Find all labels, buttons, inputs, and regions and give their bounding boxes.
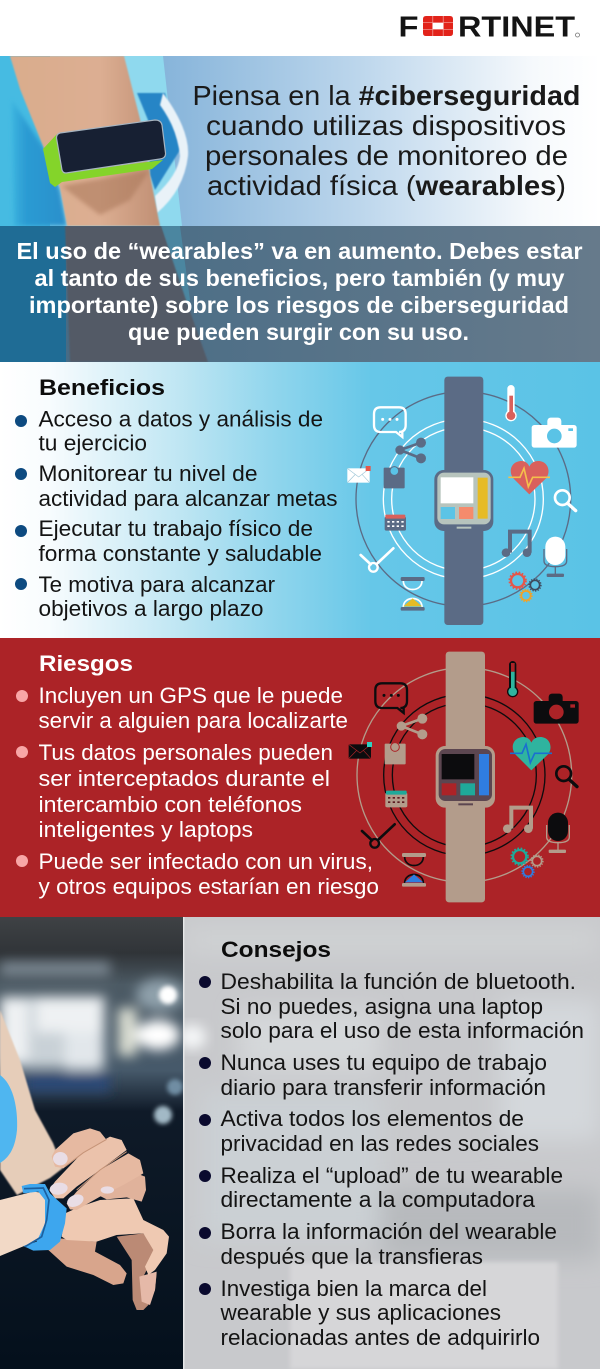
list: riesgos: inteligentes y laptops xyxy=(38,817,253,842)
icon: hourglass xyxy=(401,577,425,611)
panel: beneficios xyxy=(0,362,600,638)
list: consejos: relacionadas antes de adquirirlo xyxy=(220,1325,540,1350)
icon: microphone xyxy=(544,537,567,577)
banner text xyxy=(16,238,583,345)
list: consejos: Nunca uses tu equipo de trabajo xyxy=(220,1050,547,1075)
list: riesgos xyxy=(16,683,379,899)
list: beneficios: tu ejercicio xyxy=(38,430,147,456)
icon: chat bubble xyxy=(375,683,407,713)
upper fingers xyxy=(99,1173,146,1202)
banner text: El uso de “wearables” va en aumento. Debes estar xyxy=(16,238,583,264)
icon: scale xyxy=(385,743,406,764)
list: riesgos: ser interceptados durante el xyxy=(38,766,330,791)
heading: riesgos: Riesgos xyxy=(39,651,133,676)
title xyxy=(192,80,580,201)
list: beneficios: Te motiva para alcanzar xyxy=(38,572,275,597)
panel: consejos xyxy=(178,917,600,1369)
list: beneficios: objetivos a largo plazo xyxy=(38,596,264,621)
banner text: al tanto de sus beneficios, pero también (y muy xyxy=(34,265,565,291)
panel: riesgos xyxy=(0,638,600,917)
list: consejos: Deshabilita la función de bluetooth. xyxy=(220,969,576,994)
band screen xyxy=(56,120,166,173)
list: consejos: directamente a la computadora xyxy=(220,1187,536,1212)
forearm xyxy=(0,1192,47,1256)
illustration: blue smartwatch with icons xyxy=(347,377,577,625)
panel: intro banner xyxy=(0,226,600,362)
hand and wrist xyxy=(0,1128,169,1310)
icon: gears xyxy=(509,572,541,602)
list: consejos: diario para transferir información xyxy=(220,1075,546,1100)
back of hand xyxy=(62,1198,169,1275)
list: beneficios: forma constante y saludable xyxy=(38,541,322,566)
lower thumb xyxy=(48,1238,127,1285)
icon: scale xyxy=(384,467,405,488)
list: consejos: Realiza el “upload” de tu wearable xyxy=(220,1163,563,1188)
list: riesgos: Tus datos personales pueden xyxy=(38,740,333,765)
panel: header with photo and title xyxy=(0,56,600,226)
photo: arm with green fitness band xyxy=(0,56,188,226)
list: consejos: Investiga bien la marca del xyxy=(220,1276,487,1301)
banner text: importante) sobre los riesgos de ciberseguridad xyxy=(29,292,569,318)
icon: heart xyxy=(510,737,552,770)
list: riesgos: Incluyen un GPS que le puede xyxy=(38,683,343,708)
list: riesgos: Puede ser infectado con un virus, xyxy=(38,849,373,874)
list: consejos: wearable y sus aplicaciones xyxy=(219,1300,501,1325)
list: beneficios: Acceso a datos y análisis de xyxy=(38,406,323,432)
list: beneficios: Monitorear tu nivel de xyxy=(38,461,258,486)
icon: calendar xyxy=(385,791,407,807)
title: actividad física ( wearables) xyxy=(207,170,566,201)
banner text: que pueden surgir con su uso. xyxy=(128,319,469,345)
logo: Fortinet: RTINET xyxy=(458,12,575,44)
icon: hourglass xyxy=(402,853,426,887)
logo: Fortinet xyxy=(398,12,580,44)
list: beneficios xyxy=(15,406,338,621)
title: personales de monitoreo de xyxy=(205,140,568,171)
icon: share xyxy=(397,714,427,739)
list: riesgos: y otros equipos estarían en riesgo xyxy=(38,874,379,899)
icon: music note xyxy=(503,808,533,833)
icon: magnifier xyxy=(555,490,576,511)
icon: magnifier xyxy=(556,766,577,787)
icon: envelope xyxy=(347,466,371,483)
icon: thermometer xyxy=(505,385,517,421)
list: beneficios: Ejecutar tu trabajo físico de xyxy=(38,516,313,541)
icon: chat bubble xyxy=(374,407,406,437)
list: consejos: Si no puedes, asigna una laptop xyxy=(220,994,543,1019)
list: consejos: Activa todos los elementos de xyxy=(220,1106,524,1131)
photo: hands touching wristband in gym xyxy=(0,917,184,1369)
icon: share xyxy=(395,438,426,463)
icon: clock hands xyxy=(361,548,393,572)
nails xyxy=(53,1152,68,1165)
list: riesgos: intercambio con teléfonos xyxy=(38,792,302,817)
list: consejos: Borra la información del wearable xyxy=(220,1219,557,1244)
hanging fingers xyxy=(117,1233,157,1310)
icon: clock hands xyxy=(362,824,395,848)
list: riesgos: servir a alguien para localizarte xyxy=(38,708,348,733)
icon: camera xyxy=(534,694,579,724)
icon: thermometer xyxy=(507,661,518,697)
heading: beneficios: Beneficios xyxy=(39,375,165,400)
title: Piensa en la #ciberseguridad xyxy=(192,80,580,111)
icon: camera xyxy=(532,418,577,448)
list: consejos: privacidad en las redes sociales xyxy=(220,1131,539,1156)
band shadow xyxy=(62,170,150,215)
list: consejos xyxy=(199,969,584,1350)
illustration: red smartwatch with icons xyxy=(349,652,579,902)
band strap xyxy=(43,134,163,187)
heading: consejos: Consejos xyxy=(221,937,331,962)
logo: Fortinet: F xyxy=(398,12,418,44)
icon: microphone xyxy=(547,813,569,853)
icon: gears xyxy=(511,848,543,878)
list: consejos: solo para el uso de esta información xyxy=(220,1018,584,1043)
blue wristband xyxy=(22,1184,67,1251)
title: cuando utilizas dispositivos xyxy=(206,110,566,141)
upper arm and blue top xyxy=(0,1010,63,1195)
icon: envelope xyxy=(349,742,372,759)
icon: music note xyxy=(502,532,531,557)
icon: calendar xyxy=(385,515,406,531)
list: consejos: después que la transfieras xyxy=(220,1244,483,1269)
list: beneficios: actividad para alcanzar metas xyxy=(38,486,338,511)
icon: heart xyxy=(508,461,550,494)
